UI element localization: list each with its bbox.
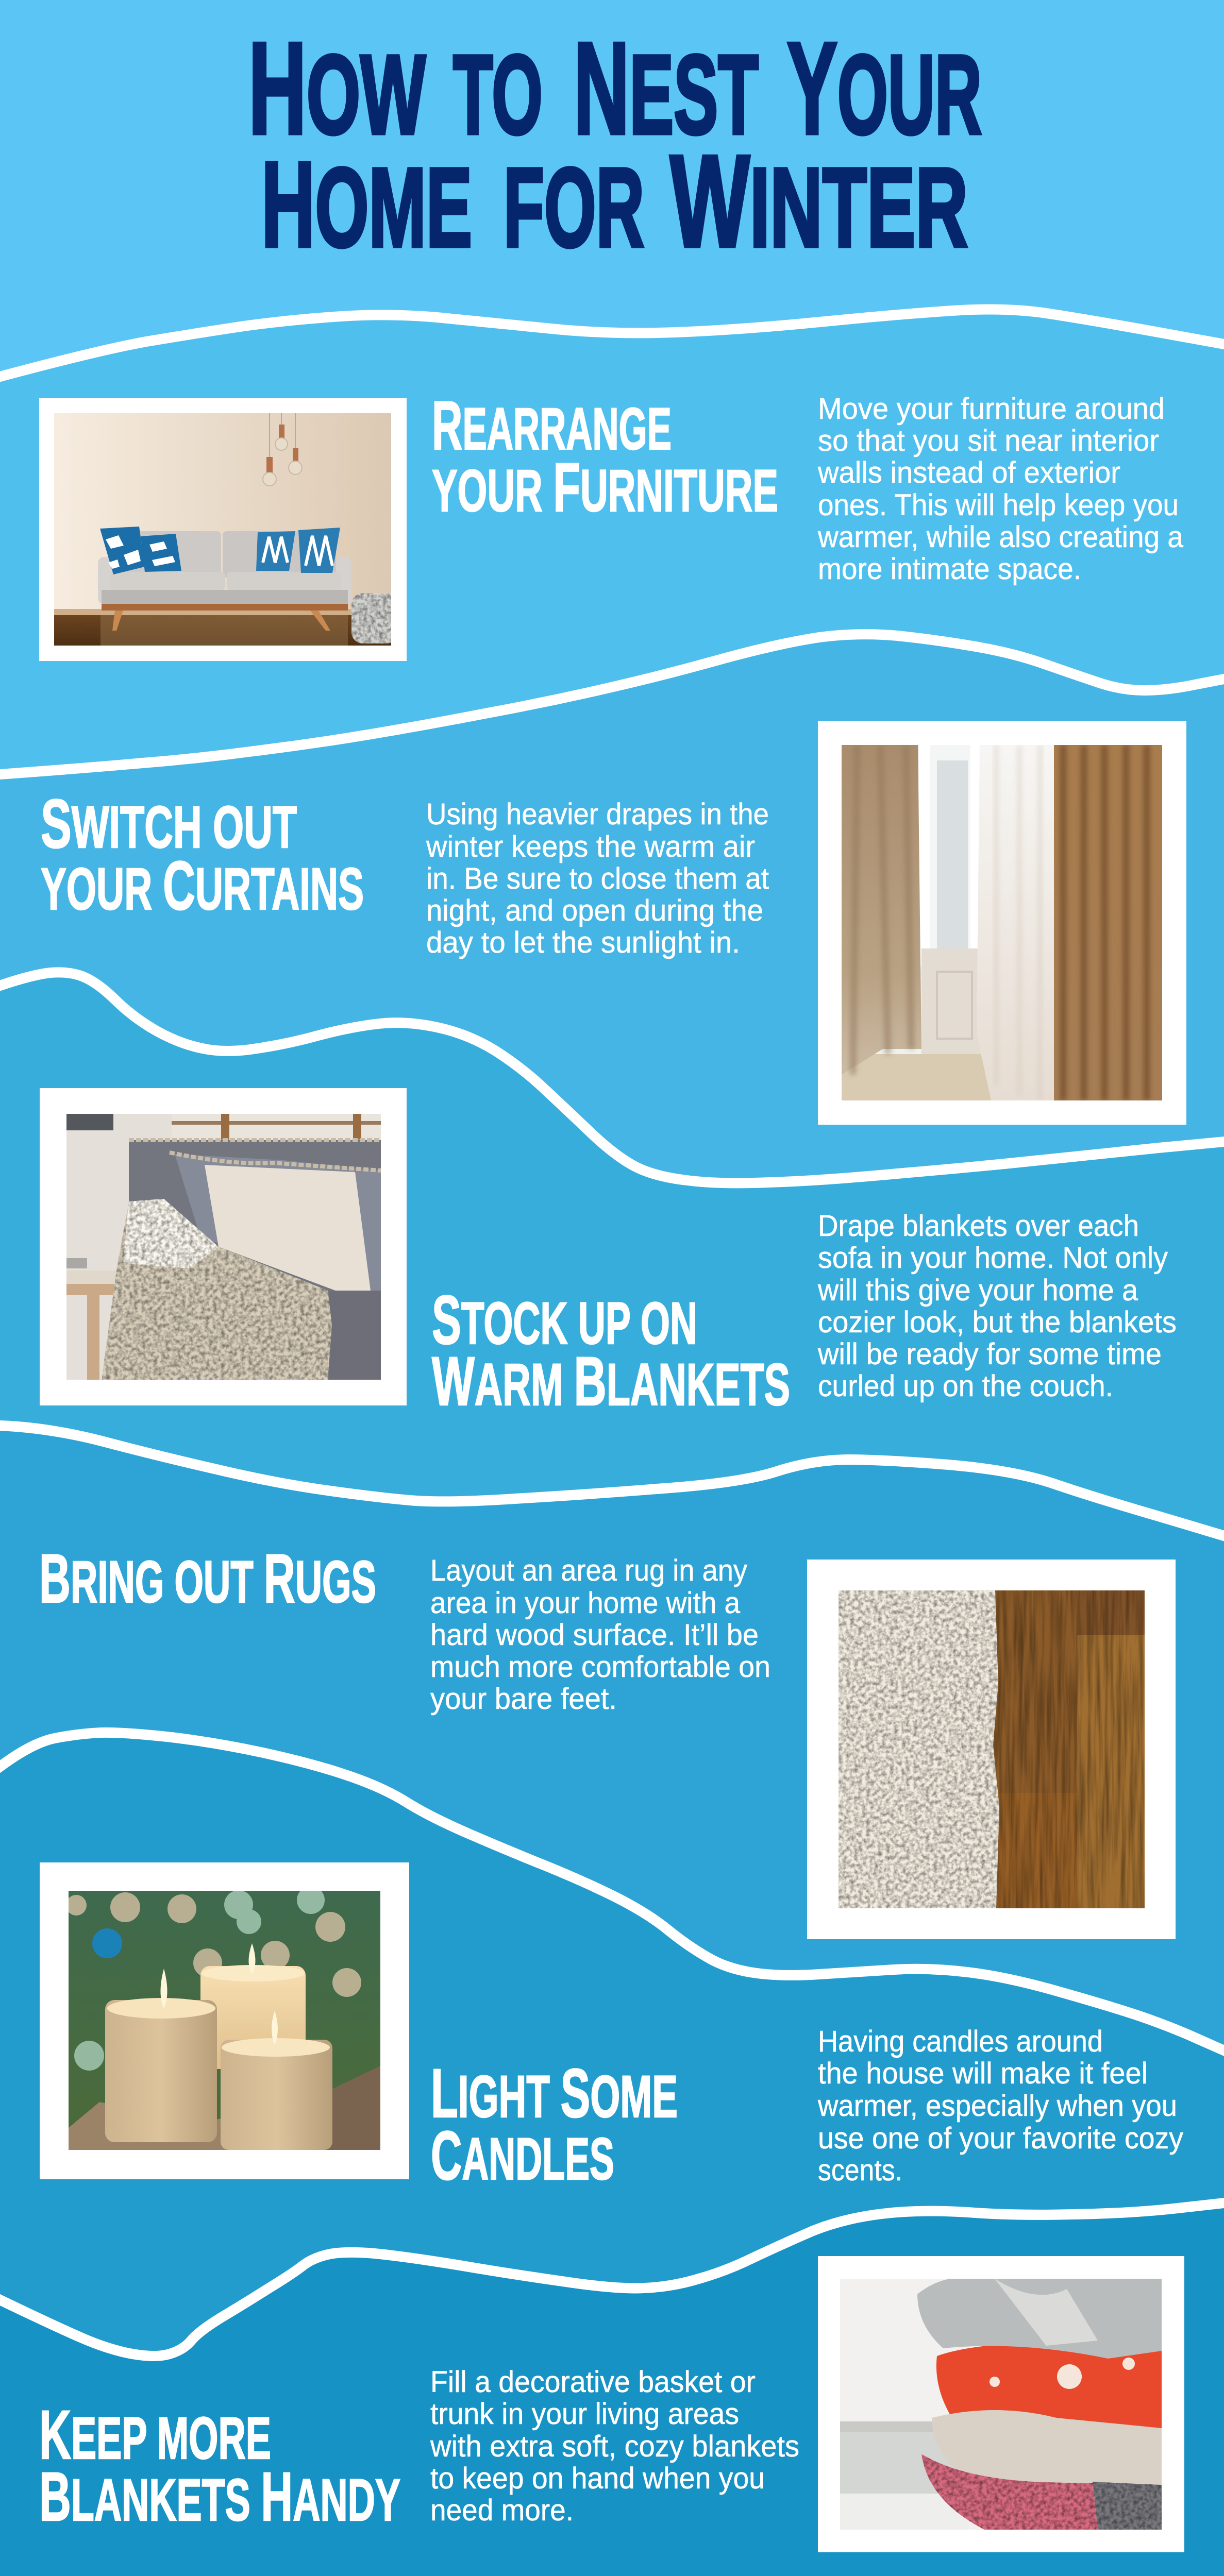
heading	[432, 1282, 790, 1420]
title: YOUR	[787, 15, 1087, 161]
photo frame: folded blankets	[818, 2256, 1184, 2552]
body text: trunk in your living areas	[430, 2397, 739, 2431]
body text: the house will make it feel	[818, 2057, 1148, 2090]
body text	[817, 1209, 1177, 1403]
body text	[817, 392, 1184, 586]
body text: to keep on hand when you	[430, 2462, 765, 2495]
body text: sofa in your home. Not only	[818, 1241, 1168, 1275]
title: TO	[453, 32, 543, 158]
body text: curled up on the couch.	[818, 1369, 1113, 1403]
title: NEST	[574, 15, 848, 161]
body text	[426, 798, 769, 959]
body text: will this give your home a	[817, 1274, 1138, 1307]
photo frame: rug	[807, 1560, 1176, 1939]
title: HOME	[261, 137, 572, 273]
title: HOW	[248, 15, 500, 161]
photo frame: blankets	[40, 1088, 407, 1405]
body text: more intimate space.	[818, 552, 1081, 586]
body text	[430, 2365, 799, 2527]
body text: use one of your favorite cozy	[818, 2122, 1183, 2155]
heading: CANDLES	[431, 2117, 614, 2194]
body text: Move your furniture around	[818, 392, 1165, 426]
body text: ones. This will help keep you	[818, 488, 1179, 522]
body text: scents.	[818, 2154, 902, 2187]
body text: cozier look, but the blankets	[818, 1306, 1177, 1339]
body text	[817, 2025, 1183, 2187]
panel: light some candles	[40, 1862, 1183, 2194]
heading: KEEP MORE	[39, 2397, 271, 2473]
body text: so that you sit near interior	[818, 424, 1159, 457]
body text: hard wood surface. It’ll be	[430, 1618, 759, 1652]
body text: day to let the sunlight in.	[426, 926, 740, 959]
panel: keep more blankets handy	[39, 2256, 1184, 2552]
body text: Fill a decorative basket or	[430, 2365, 756, 2399]
body text: walls instead of exterior	[817, 456, 1120, 489]
heading: STOCK UP ON	[432, 1282, 697, 1359]
body text: winter keeps the warm air	[426, 830, 755, 863]
photo frame: sofa	[39, 398, 407, 661]
heading	[431, 2055, 678, 2194]
title	[248, 15, 982, 274]
panel: rearrange your furniture	[39, 387, 1184, 661]
heading: SWITCH OUT	[41, 786, 297, 862]
title: WINTER	[670, 128, 1087, 274]
heading: LIGHT SOME	[431, 2055, 678, 2132]
body text: night, and open during the	[426, 894, 763, 927]
body text: your bare feet.	[430, 1682, 617, 1716]
body text: Drape blankets over each	[818, 1209, 1139, 1243]
heading: WARM BLANKETS	[432, 1343, 790, 1420]
photo frame: curtains	[818, 721, 1186, 1125]
photo frame: candles	[40, 1862, 409, 2179]
body text: need more.	[430, 2494, 574, 2527]
body text: area in your home with a	[430, 1586, 741, 1620]
heading: YOUR CURTAINS	[41, 848, 364, 924]
heading: YOUR FURNITURE	[432, 449, 778, 526]
panel: stock up on warm blankets	[40, 1088, 1177, 1420]
body text	[430, 1554, 770, 1716]
panel: bring out rugs	[39, 1540, 1176, 1939]
body text: warmer, especially when you	[817, 2089, 1177, 2123]
heading	[39, 2397, 400, 2535]
heading: REARRANGE	[432, 387, 672, 464]
body text: in. Be sure to close them at	[426, 862, 769, 895]
heading: BRING OUT RUGS	[39, 1540, 376, 1617]
body text: Having candles around	[818, 2025, 1103, 2058]
heading	[41, 786, 364, 924]
heading: BLANKETS HANDY	[39, 2459, 400, 2535]
panel: switch out your curtains	[41, 721, 1186, 1125]
body text: will be ready for some time	[817, 1337, 1162, 1371]
body text: Layout an area rug in any	[430, 1554, 747, 1587]
body text: Using heavier drapes in the	[426, 798, 769, 831]
body text: much more comfortable on	[430, 1650, 770, 1684]
body text: warmer, while also creating a	[817, 520, 1184, 554]
heading	[432, 387, 778, 526]
body text: with extra soft, cozy blankets	[430, 2430, 799, 2463]
title: FOR	[504, 145, 644, 270]
